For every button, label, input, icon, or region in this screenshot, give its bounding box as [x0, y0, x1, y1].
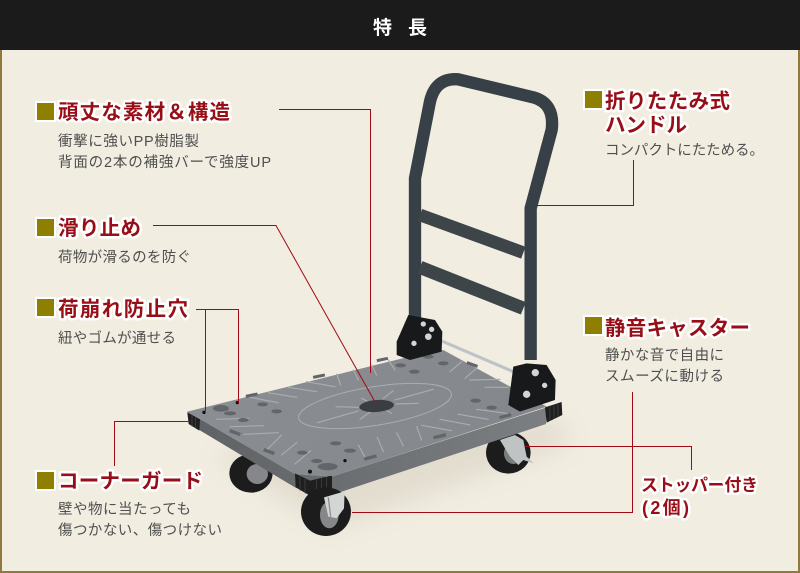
- title bar: 長: [408, 18, 427, 39]
- callout: 荷崩れ防止穴: 荷崩れ防止穴: [58, 298, 188, 321]
- callout: 滑り止め: 荷物が滑るのを防ぐ: [58, 249, 191, 266]
- callout: 折りたたみ式ハンドル: ハンドル: [605, 114, 687, 137]
- callout: 荷崩れ防止穴: [35, 297, 188, 347]
- callout: 荷崩れ防止穴: 紐やゴムが通せる: [58, 329, 176, 347]
- deck details: [202, 355, 512, 474]
- callout: 静音キャスター: スムーズに動ける: [605, 368, 724, 385]
- callout: 頑丈な素材&構造: [35, 101, 271, 171]
- callout: 折りたたみ式ハンドル: コンパクトにたためる。: [605, 142, 764, 159]
- callout: 折りたたみ式ハンドル: [583, 89, 764, 159]
- front caster wheel: [301, 487, 351, 536]
- title bar: [0, 0, 800, 50]
- back right wheel with stopper: [486, 432, 534, 474]
- title bar: 特: [373, 17, 392, 39]
- callout: 静音キャスター: 静かな音で自由に: [605, 347, 724, 364]
- callout: 静音キャスター: [583, 315, 750, 385]
- product illustration: folding hand truck: [187, 79, 562, 536]
- floor shadow: [215, 420, 570, 530]
- callout: ストッパー付き（2個）: [641, 476, 758, 518]
- leader lines: [114, 110, 692, 512]
- callout: 折りたたみ式ハンドル: 折りたたみ式: [605, 90, 730, 113]
- back left wheel: [229, 454, 273, 493]
- callout: コーナーガード: 傷つかない、傷つけない: [58, 522, 222, 539]
- folding hinge brackets and rod: [397, 315, 556, 412]
- callout: 滑り止め: [35, 217, 191, 266]
- callout: 滑り止め: 滑り止め: [58, 217, 141, 240]
- deck top surface: [187, 350, 547, 477]
- callout: ストッパー付き（2個）: (2個): [642, 498, 689, 518]
- callout: コーナーガード: [35, 470, 222, 539]
- handle: [415, 79, 552, 360]
- callout: 頑丈な素材&構造: 頑丈な素材＆構造: [58, 101, 230, 124]
- deck side faces: [187, 407, 547, 495]
- callout: ストッパー付き（2個）: ストッパー付き: [641, 476, 758, 495]
- corner guards: [187, 402, 562, 497]
- callout: コーナーガード: コーナーガード: [58, 470, 203, 493]
- callout: 静音キャスター: 静音キャスター: [605, 317, 750, 340]
- callout: 頑丈な素材&構造: 衝撃に強いPP樹脂製: [58, 133, 199, 150]
- callout: コーナーガード: 壁や物に当たっても: [58, 501, 191, 518]
- callout: 頑丈な素材&構造: 背面の2本の補強バーで強度UP: [58, 154, 271, 171]
